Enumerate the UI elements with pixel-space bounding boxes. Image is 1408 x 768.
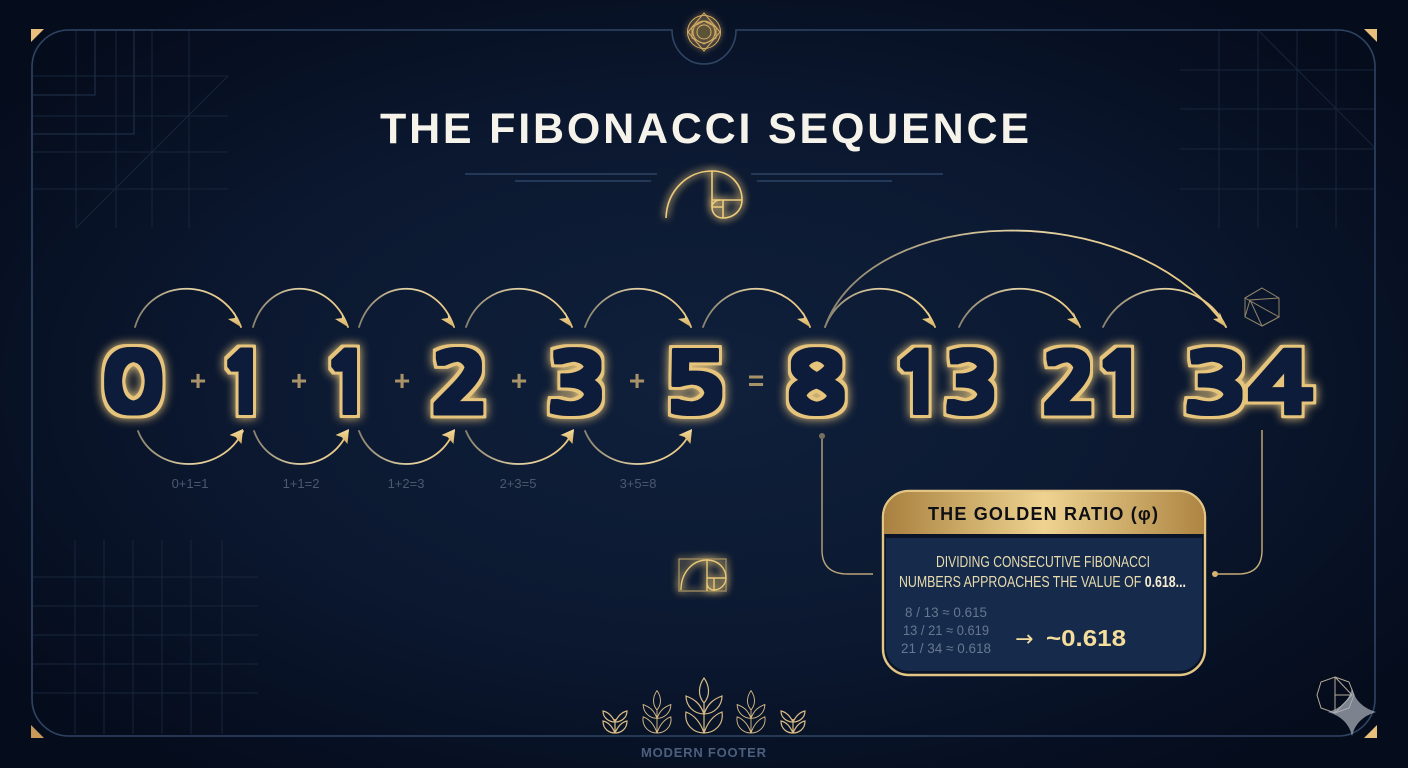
callout header band — [884, 492, 1204, 534]
sum captions — [172, 476, 656, 491]
icon: polyhedron — [1245, 288, 1279, 326]
sequence numbers: 5 — [664, 345, 726, 425]
title rules — [465, 174, 943, 181]
ratio list: 21 / 34 ≈ 0.618 — [901, 640, 991, 656]
bottom-left geometric grid — [33, 540, 258, 734]
ratio result — [1015, 625, 1126, 652]
operators: + — [511, 365, 527, 396]
callout description: NUMBERS APPROACHES THE VALUE OF 0.618... — [899, 574, 1186, 591]
ratio list: 8 / 13 ≈ 0.615 — [905, 604, 987, 620]
callout: golden ratio — [883, 491, 1205, 675]
sequence numbers: 2 — [431, 345, 489, 425]
sequence numbers — [101, 344, 1313, 425]
ratio list — [901, 604, 991, 656]
icon: top medallion — [688, 13, 720, 51]
operators: + — [190, 365, 206, 396]
icon: golden spiral — [666, 171, 742, 218]
sequence numbers: 1 — [324, 345, 372, 425]
callout description — [899, 554, 1186, 591]
sequence numbers: 8 — [787, 345, 846, 425]
arrows: bottom sum arcs — [138, 429, 692, 464]
operators: = — [748, 365, 764, 396]
top-left geometric grid — [33, 30, 228, 228]
callout heading: THE GOLDEN RATIO (φ) — [928, 504, 1158, 524]
ratio result: ~0.618 — [1046, 625, 1126, 651]
icon: golden rectangle — [679, 559, 726, 591]
callout body panel — [886, 538, 1202, 671]
connector: left — [819, 433, 873, 574]
icon: wheat row — [603, 678, 805, 733]
sum captions: 1+1=2 — [283, 476, 319, 491]
sum captions: 2+3=5 — [500, 476, 536, 491]
sequence numbers: 21 — [1042, 344, 1148, 424]
ratio result: → — [1015, 627, 1033, 652]
title: THE FIBONACCI SEQUENCE — [380, 105, 1029, 153]
connector: right — [1212, 430, 1262, 577]
sum captions: 1+2=3 — [388, 476, 424, 491]
top-right geometric grid — [1180, 30, 1375, 228]
arrows: top sequence arcs — [135, 231, 1226, 327]
operators: + — [291, 365, 307, 396]
operators: + — [394, 365, 410, 396]
sum captions: 0+1=1 — [172, 476, 208, 491]
sequence numbers: 1 — [220, 345, 268, 425]
callout description: DIVIDING CONSECUTIVE FIBONACCI — [936, 554, 1150, 571]
footer label: MODERN FOOTER — [641, 745, 767, 760]
operators — [190, 365, 764, 396]
operators: + — [629, 365, 645, 396]
sequence numbers: 13 — [892, 344, 998, 424]
icon: sparkle — [1328, 688, 1376, 736]
icon: corner polyhedron — [1317, 677, 1354, 713]
sequence numbers: 34 — [1183, 345, 1313, 425]
sum captions: 3+5=8 — [620, 476, 656, 491]
ratio list: 13 / 21 ≈ 0.619 — [903, 622, 989, 638]
sequence numbers: 0 — [101, 345, 165, 425]
sequence numbers: 3 — [547, 345, 607, 425]
